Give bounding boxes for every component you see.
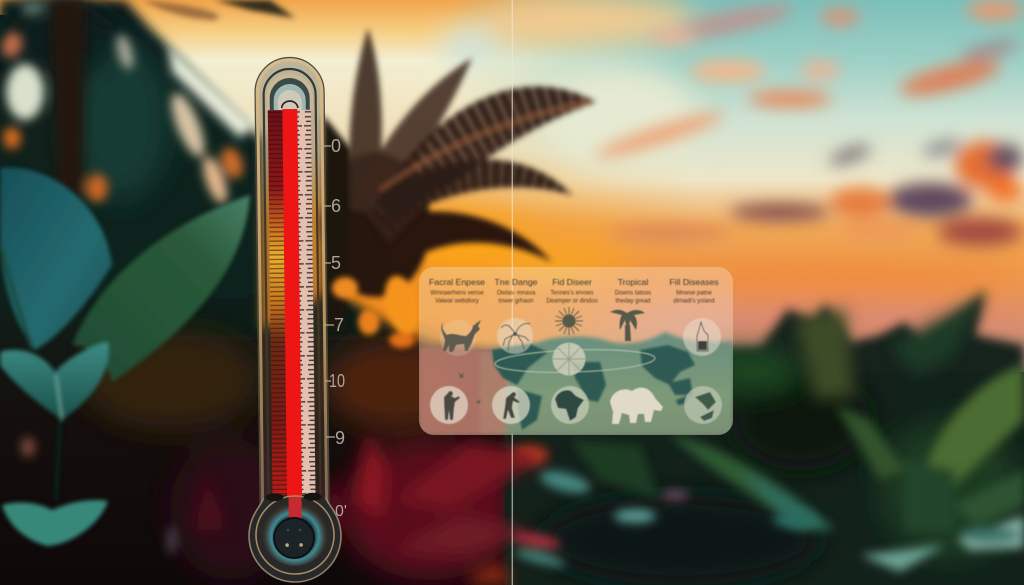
- temperature scale labels: 6: [331, 196, 341, 216]
- column headings: Facral Enpese: [429, 277, 485, 287]
- red foliage: [195, 430, 550, 585]
- left dark foliage mass: [0, 0, 530, 585]
- column descriptions: Vaiwar webdiory: [435, 298, 479, 304]
- temperature scale labels: 7: [334, 315, 344, 335]
- column descriptions: theday gread: [615, 298, 651, 304]
- thermometer: [243, 56, 342, 583]
- column descriptions: Deamper or dindoo: [546, 298, 598, 304]
- sky glow: [410, 0, 1020, 340]
- column headings: Tropical: [618, 277, 648, 287]
- icon: bear: [610, 388, 663, 424]
- column descriptions: Mnwse patne: [676, 290, 713, 296]
- temperature scale labels: 10: [329, 371, 345, 391]
- bulb: [248, 492, 342, 583]
- icon: sun burst: [555, 307, 583, 335]
- icon: spider circle: [497, 318, 533, 354]
- column descriptions: Downs tatoos: [615, 290, 651, 296]
- column headings: Fill Diseases: [669, 277, 719, 287]
- vertical divider line: [512, 0, 513, 585]
- column descriptions: Wmnaerhens vense: [430, 290, 484, 296]
- temperature scale labels: 5: [331, 253, 341, 273]
- icon: small insects: [459, 372, 481, 404]
- icon: palm tree: [610, 310, 645, 341]
- column descriptions: Owlas- mnava: [497, 290, 536, 296]
- world map continents: [492, 344, 695, 430]
- temperature scale labels: 0': [335, 503, 347, 520]
- background palm tree: [142, 0, 552, 330]
- icon: Africa globe: [551, 386, 589, 424]
- clouds: [593, 0, 1023, 246]
- icon: central globe: [495, 342, 655, 376]
- red mercury column: [282, 109, 302, 497]
- icon: globe right: [684, 386, 722, 424]
- temperature scale labels: 9: [335, 428, 345, 448]
- temperature scale labels: 0: [331, 136, 341, 156]
- hills behind map: [419, 332, 733, 435]
- left colored scale: [268, 110, 288, 495]
- column descriptions: Tennes's ervoes: [550, 290, 594, 296]
- column descriptions: tnwer grhaon: [498, 298, 534, 304]
- temperature scale labels: [321, 136, 347, 520]
- column descriptions: dirnadi's ysland: [673, 298, 715, 304]
- column descriptions: [430, 290, 715, 304]
- glass tube: [254, 57, 330, 505]
- icon: walking figure circle: [492, 386, 530, 424]
- column headings: Tne Dange: [495, 277, 538, 287]
- right foliage: [505, 290, 1024, 585]
- icon: person circle: [430, 386, 468, 424]
- panel: disease infographic card: [419, 267, 733, 435]
- sun glow spots: [332, 272, 425, 348]
- column headings: [429, 277, 719, 287]
- left blurred trunk and sky gaps: [0, 0, 255, 554]
- right tick scale: [297, 110, 316, 495]
- column headings: Fid Diseer: [552, 277, 592, 287]
- palm fronds: [349, 28, 596, 245]
- icon: bottle circle: [683, 318, 721, 356]
- icon: deer: [440, 320, 481, 356]
- teal leaves: [0, 167, 250, 546]
